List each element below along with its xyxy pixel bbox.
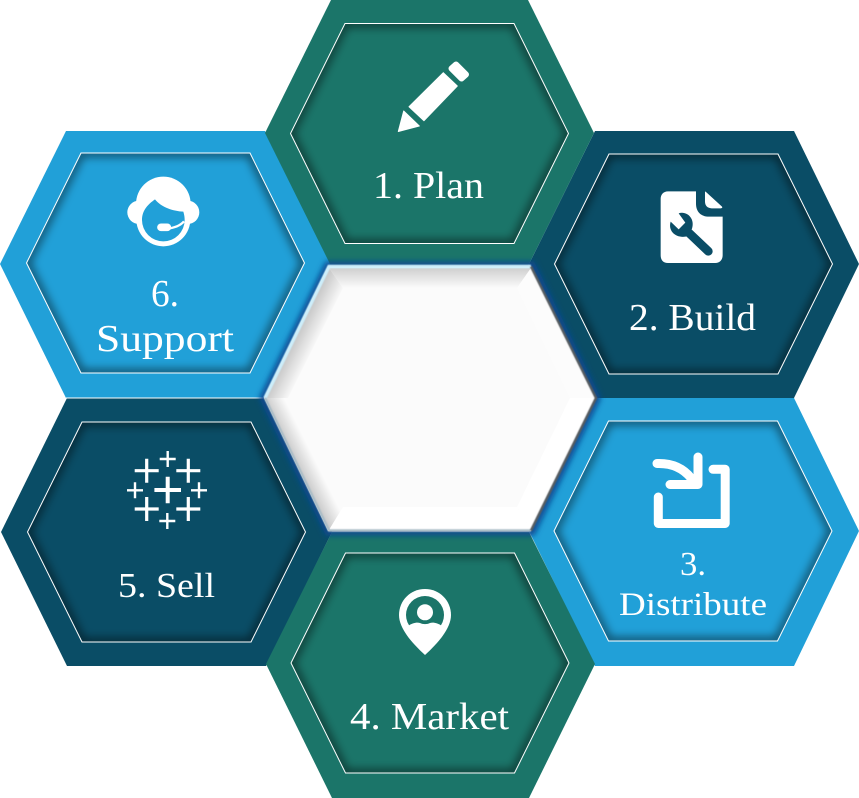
label: 6.: 6. bbox=[151, 273, 179, 315]
panel: 3. Distribute bbox=[529, 398, 859, 666]
label: 2. Build: 2. Build bbox=[629, 297, 756, 339]
icon: pencil bbox=[398, 64, 466, 132]
icon: tableau crosses bbox=[127, 451, 207, 529]
icon: location pin with person bbox=[399, 589, 451, 655]
panel: 2. Build bbox=[529, 131, 859, 398]
icon: redistribute arrow bbox=[657, 457, 725, 524]
label: 3.: 3. bbox=[680, 546, 706, 583]
label: Support: Support bbox=[96, 318, 234, 360]
panel: 5. Sell bbox=[1, 398, 332, 666]
icon: headset agent bbox=[127, 177, 199, 246]
label: 1. Plan: 1. Plan bbox=[373, 165, 484, 207]
label: 5. Sell: 5. Sell bbox=[118, 566, 215, 605]
panel: 1. Plan bbox=[265, 0, 594, 266]
label: 4. Market: 4. Market bbox=[350, 696, 509, 738]
panel: 4. Market bbox=[266, 532, 595, 798]
divider line between Support and Sell bbox=[66, 397, 266, 399]
label: Distribute: Distribute bbox=[619, 587, 767, 623]
panel: center blank hexagon bbox=[263, 265, 597, 532]
icon: document with wrench bbox=[661, 191, 723, 263]
panel: 6. Support bbox=[0, 131, 331, 398]
